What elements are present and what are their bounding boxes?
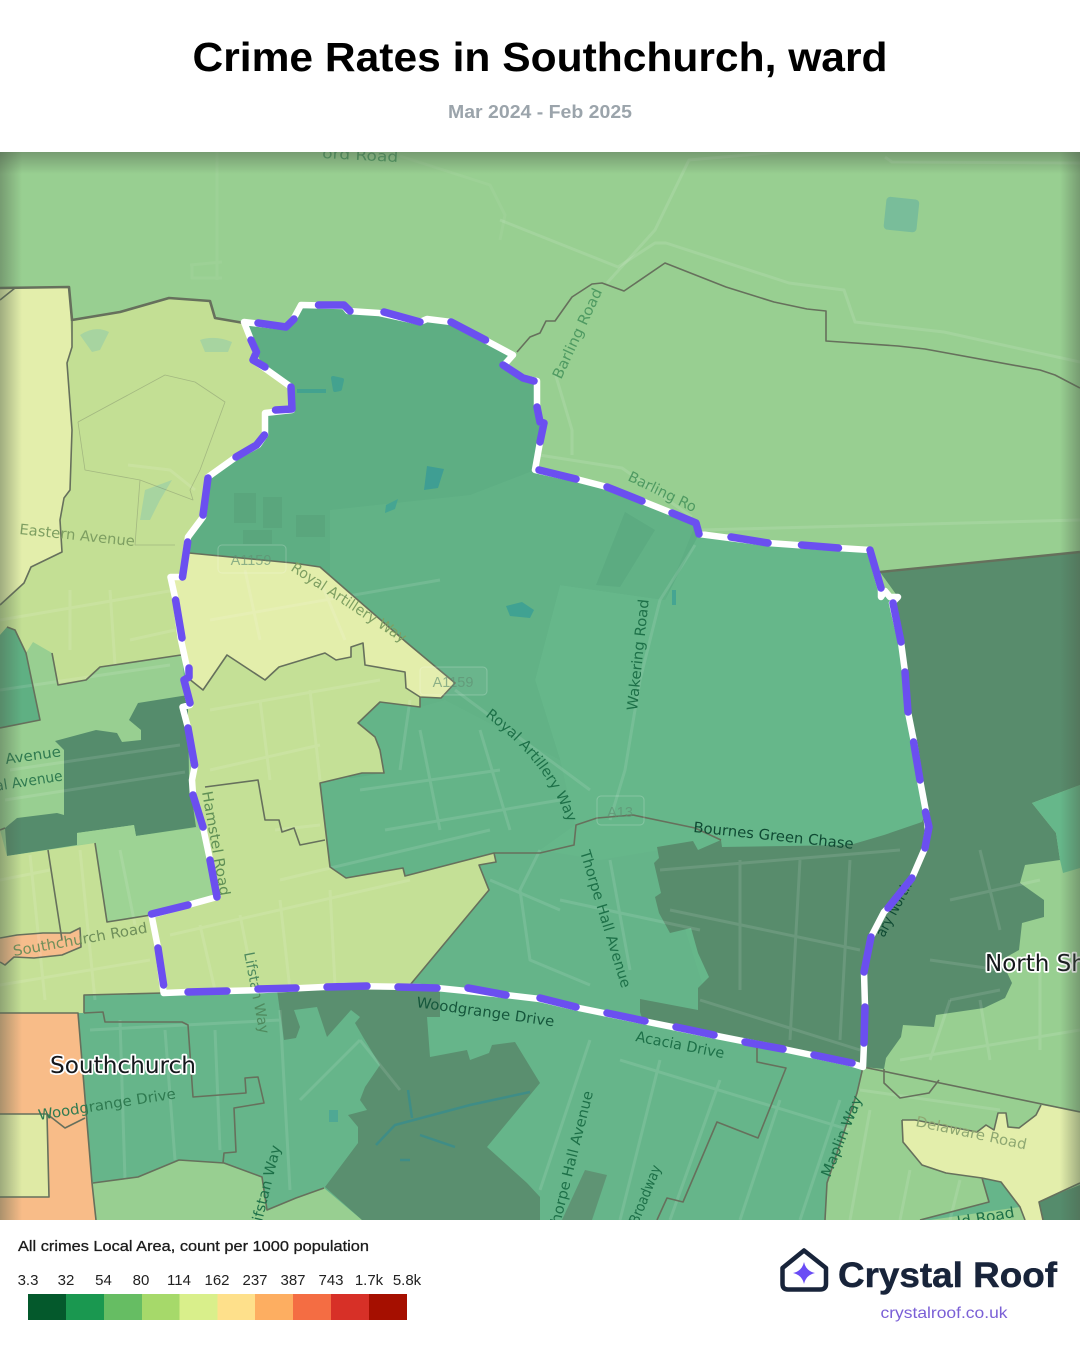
place label: Southchurch: Southchurch bbox=[50, 1053, 196, 1079]
region: Delaware Road pale ward bbox=[902, 1105, 1080, 1220]
legend tick values: 80 bbox=[133, 1272, 149, 1289]
label: Wakering Road: Wakering Road bbox=[625, 598, 653, 711]
region: south central dark bbox=[277, 986, 540, 1220]
label: Woodgrange Drive west: Woodgrange Drive bbox=[37, 1086, 177, 1124]
label: Lifstan Way north: Lifstan Way bbox=[240, 951, 272, 1036]
label: left Avenue upper: Avenue bbox=[4, 744, 62, 768]
legend tick values: 237 bbox=[242, 1272, 268, 1289]
region: light block under dark block bbox=[78, 825, 146, 836]
road shields bbox=[218, 545, 644, 825]
region: left dark block bbox=[5, 695, 196, 856]
water: north stream and pond bbox=[297, 378, 342, 391]
legend tick values: 54 bbox=[95, 1272, 112, 1289]
water: left ponds bbox=[80, 329, 232, 520]
label: Woodgrange Drive: Woodgrange Drive bbox=[415, 995, 555, 1030]
region: ward north-west, darker green bbox=[190, 308, 697, 778]
subtitle: date range: Mar 2024 - Feb 2025 bbox=[448, 102, 632, 122]
water: ward lake bbox=[506, 602, 534, 618]
region: left lime bbox=[0, 298, 292, 685]
shield: A1159 centre bbox=[420, 667, 487, 695]
region: south green band bbox=[78, 986, 863, 1220]
label: Thorpe Hall Avenue south: Thorpe Hall Avenue bbox=[546, 1089, 597, 1235]
region: bottom-right green patch bbox=[920, 1178, 1020, 1220]
label: Royal Artillery Way south: Royal Artillery Way bbox=[486, 708, 576, 820]
region: lower left lime bbox=[0, 830, 163, 1013]
shield: A1159 centre: A1159 bbox=[433, 675, 473, 691]
legend tick values: 5.8k bbox=[393, 1272, 422, 1289]
region: top-left pale ward bbox=[0, 287, 72, 605]
region: ward base, lower crime green bbox=[183, 538, 924, 984]
map edge vignette bbox=[0, 152, 1080, 1220]
region: south small dark patch bbox=[562, 1170, 607, 1220]
label: Bournes Green Chase: Bournes Green Chase bbox=[693, 820, 854, 853]
region: ward central mid tone bbox=[330, 470, 696, 853]
label: Lifstan Way south: Lifstan Way bbox=[248, 1143, 285, 1231]
legend tick values: 743 bbox=[318, 1272, 344, 1289]
label: Eastern Avenue: Eastern Avenue bbox=[19, 522, 136, 550]
region: ward centre-south estates bbox=[320, 700, 575, 878]
label: Barling Road north: Barling Road bbox=[550, 286, 606, 382]
region: far-right green patch bbox=[1032, 785, 1080, 873]
legend tick values: 162 bbox=[204, 1272, 230, 1289]
label: Thorpe Hall Avenue north: Thorpe Hall Avenue bbox=[576, 848, 633, 990]
label: Delaware Road: Delaware Road bbox=[914, 1114, 1028, 1153]
region: east dark ward bbox=[640, 552, 1080, 1069]
legend tick values: 114 bbox=[167, 1272, 191, 1289]
water bodies bbox=[80, 196, 920, 1160]
legend tick values: 32 bbox=[58, 1272, 74, 1289]
legend tick values: 3.3 bbox=[18, 1272, 38, 1289]
label: Broadway: Broadway bbox=[627, 1163, 665, 1226]
label: top road: ord Road bbox=[322, 146, 399, 166]
region: pale yellow inside ward bbox=[170, 553, 455, 698]
icon: house with star bbox=[782, 1250, 826, 1290]
ward boundary: white line bbox=[152, 305, 928, 1067]
water: small pond bbox=[385, 499, 398, 513]
label: Barling Road east: Barling Ro bbox=[625, 469, 699, 516]
label: road under boundary north: ary North bbox=[873, 879, 916, 940]
website url: crystalroof.co.uk bbox=[880, 1305, 1009, 1322]
logo: Crystal Roof bbox=[782, 1250, 1057, 1322]
water: south brook bbox=[376, 1090, 530, 1160]
region: south light patch bbox=[92, 1160, 362, 1220]
legend tick values: 1.7k bbox=[355, 1272, 384, 1289]
region: small orange strip bbox=[0, 928, 81, 965]
legend bbox=[18, 1238, 422, 1320]
shield: A13 bbox=[597, 796, 644, 825]
region: ward fields bbox=[234, 493, 655, 587]
label: Hamstel Road: Hamstel Road bbox=[198, 790, 232, 897]
shield: A1159 north: A1159 bbox=[231, 553, 271, 569]
label: Royal Artillery Way north: Royal Artillery Way bbox=[288, 560, 409, 647]
water: small pond south bbox=[329, 1110, 338, 1122]
region: Southchurch orange ward bbox=[0, 1013, 96, 1220]
label: Southchurch Road: Southchurch Road bbox=[12, 921, 149, 960]
wordmark: Crystal Roof bbox=[838, 1256, 1057, 1295]
title: Crime Rates in Southchurch, ward bbox=[192, 34, 888, 80]
shield: A13: A13 bbox=[607, 805, 633, 821]
label: bottom-right road: ld Road bbox=[956, 1205, 1016, 1231]
region: bottom-right dark patch bbox=[1039, 1185, 1080, 1220]
ward boundary: purple dashes bbox=[152, 305, 929, 1063]
water: ward pond bbox=[424, 466, 444, 490]
shield: A1159 north bbox=[218, 545, 286, 573]
region: pale box in orange bbox=[0, 1114, 49, 1197]
legend colour scale bbox=[28, 1294, 407, 1320]
legend tick values: 387 bbox=[280, 1272, 306, 1289]
water: square pond bbox=[883, 196, 920, 233]
label: Maplin Way: Maplin Way bbox=[819, 1093, 866, 1179]
legend title: All crimes Local Area, count per 1000 population bbox=[18, 1238, 369, 1255]
label: Acacia Drive: Acacia Drive bbox=[634, 1029, 726, 1062]
ward outlines bbox=[0, 263, 1080, 1220]
region: lime inside ward bbox=[151, 643, 496, 993]
water: small east channels bbox=[672, 590, 676, 605]
legend tick values bbox=[18, 1272, 422, 1289]
region: ward south bbox=[410, 850, 720, 1040]
faint road network bbox=[0, 152, 1080, 1220]
region: left mid-green sliver bbox=[0, 627, 40, 728]
